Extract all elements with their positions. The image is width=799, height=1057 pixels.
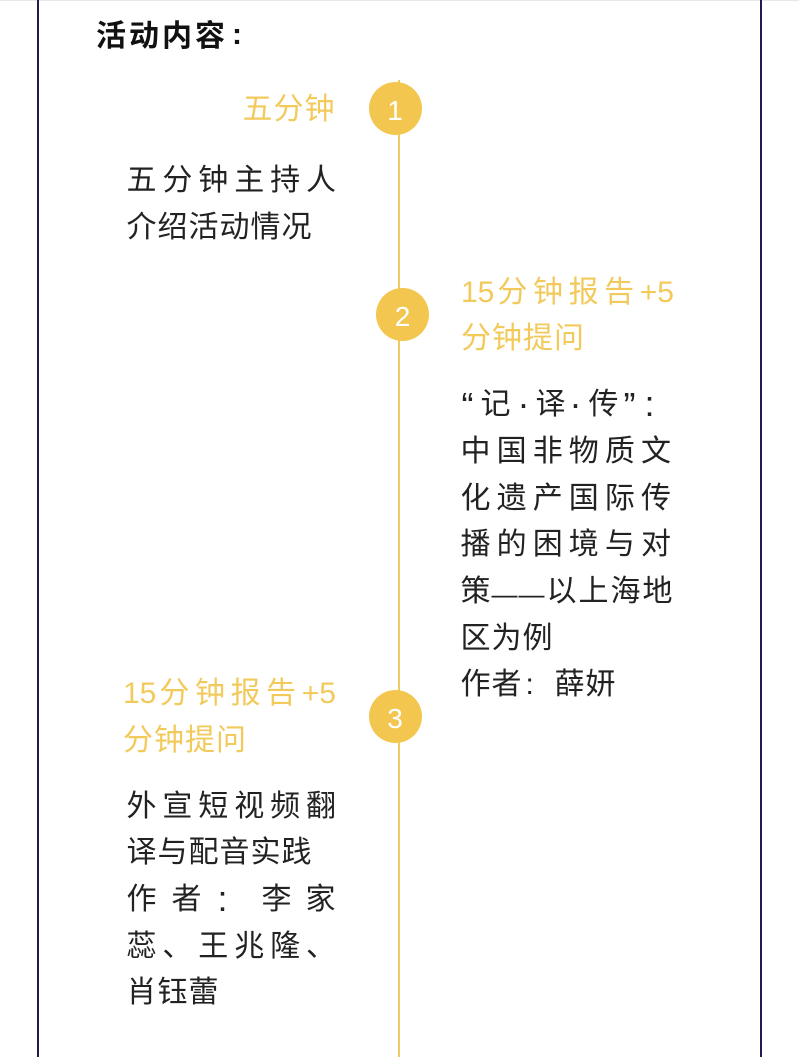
item 1 description	[126, 164, 342, 244]
heading: :	[232, 18, 245, 51]
item 3 time label: 分钟提问	[123, 724, 247, 757]
item 2 description: 传	[588, 388, 620, 421]
node 3	[368, 690, 422, 743]
item 2 description: 以	[546, 575, 578, 608]
item 2 time label: 15分钟报告+5	[461, 276, 674, 309]
item 2 description: 薛	[554, 668, 586, 701]
item 2 description: —	[492, 579, 518, 609]
item 2 description: 海	[610, 575, 642, 608]
item 2 description: :	[526, 668, 535, 701]
item 3 description: 译与配音实践	[126, 836, 312, 869]
item 1 time label: 五分钟	[242, 93, 336, 126]
item 3 description: :	[218, 878, 229, 919]
node 1: 1	[387, 95, 403, 126]
timeline axis	[398, 80, 400, 1057]
item 2 description: ·	[518, 383, 530, 424]
item 2 description: ·	[570, 383, 582, 424]
item 2 description: 者	[492, 668, 522, 701]
item 2 description: 记	[480, 388, 512, 421]
item 3 time label	[123, 677, 336, 757]
item 3 description: 蕊、王兆隆、	[126, 930, 342, 963]
item 3 time label: 15分钟报告+5	[123, 677, 336, 710]
item 2 description: :	[644, 383, 656, 424]
item 3 description: 家	[306, 883, 336, 916]
item 3 description	[126, 790, 342, 1009]
item 3 description: 肖钰蕾	[126, 976, 220, 1009]
item 2 description: —	[518, 579, 546, 609]
item 1 description: 五分钟主持人	[126, 164, 342, 197]
item 2 description: ”	[624, 385, 636, 426]
item 2 description: 化遗产国际传	[460, 482, 677, 515]
item 2 description	[460, 383, 677, 701]
item 2 description: 译	[536, 388, 566, 421]
item 3 description: 作	[126, 883, 158, 916]
item 1 description: 介绍活动情况	[126, 211, 312, 244]
item 2 time label: 分钟提问	[461, 322, 585, 355]
top edge band	[0, 0, 799, 1]
item 2 description: 中国非物质文	[460, 435, 677, 468]
item 2 description: 播的困境与对	[460, 528, 677, 561]
item 2 description: 策	[460, 575, 492, 608]
node 1	[368, 82, 422, 135]
item 3 description: 外宣短视频翻	[126, 790, 342, 823]
node 3: 3	[387, 703, 403, 734]
item 2 description: “	[462, 385, 474, 426]
item 2 description: 妍	[586, 668, 616, 701]
left border line	[37, 0, 39, 1057]
item 2 description: 区为例	[460, 622, 554, 655]
item 3 description: 者	[172, 883, 202, 916]
item 2 description: 上	[578, 575, 610, 608]
item 2 description: 作	[460, 668, 492, 701]
item 3 description: 李	[262, 883, 292, 916]
right border line	[760, 0, 762, 1057]
item 2 time label	[461, 276, 674, 355]
node 2: 2	[395, 301, 410, 332]
item 2 description: 地	[642, 575, 674, 608]
heading: 活动内容	[96, 20, 228, 53]
node 2	[376, 288, 429, 341]
